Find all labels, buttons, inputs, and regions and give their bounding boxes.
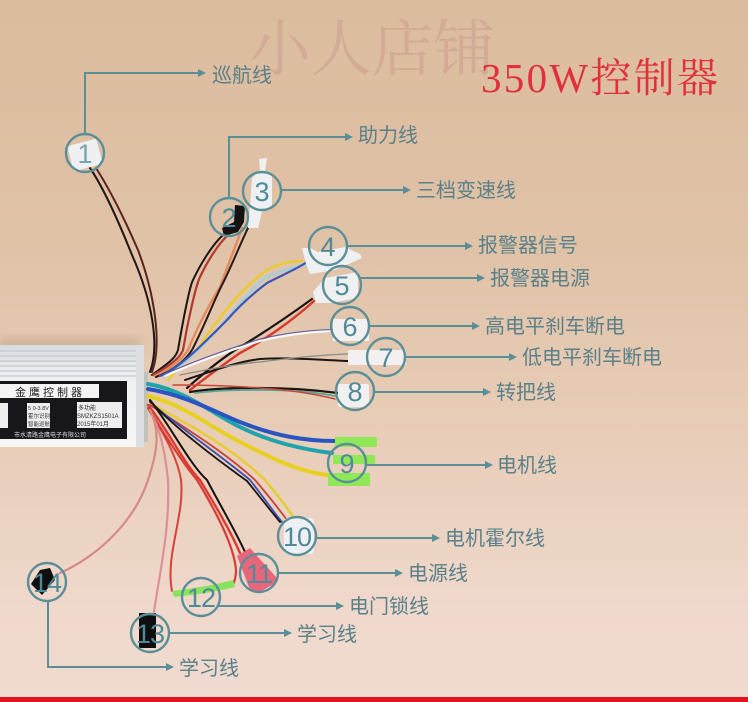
callout 5 xyxy=(323,266,590,304)
connector 8 plug xyxy=(338,384,369,407)
callout 10: 电机霍尔线 xyxy=(445,527,545,550)
connector 13 plug xyxy=(139,613,156,648)
connector 1 plug xyxy=(67,139,103,171)
callout 2: 2 xyxy=(221,203,237,233)
connector 3 plug xyxy=(248,158,272,228)
wires: connectors 6 and 7 xyxy=(165,330,348,380)
callout 5: 报警器电源 xyxy=(490,267,590,290)
connector 9 terminals xyxy=(328,437,377,486)
controller label: 5 0-3.8V xyxy=(28,406,49,412)
callout 6: 6 xyxy=(342,312,358,342)
wires: connectors 4 and 5 xyxy=(160,261,314,390)
callout 14: 学习线 xyxy=(179,657,239,680)
callout 9: 电机线 xyxy=(497,454,557,477)
connector 4 plug xyxy=(302,247,362,274)
callout 9: 9 xyxy=(339,449,355,479)
callout 11: 电源线 xyxy=(408,562,468,585)
callout 14 xyxy=(28,563,239,680)
controller unit xyxy=(0,338,148,447)
controller label xyxy=(0,381,127,439)
callout 2 xyxy=(210,124,418,236)
wires: connectors 2 and 3 xyxy=(152,228,248,377)
wires: connector 8 xyxy=(173,385,338,399)
callout 7: 7 xyxy=(378,343,394,373)
wires: connectors 9 xyxy=(148,384,335,475)
callout 11 xyxy=(240,554,468,592)
connector 5 plug xyxy=(313,272,358,303)
callout 12: 12 xyxy=(187,583,215,613)
callout 10 xyxy=(278,517,545,555)
callout 12: 电门锁线 xyxy=(349,595,429,618)
wires: connector 13 xyxy=(152,415,168,612)
wire bundle xyxy=(60,168,348,612)
callout 13: 13 xyxy=(136,619,164,649)
wires: connector 11 and 12 loop xyxy=(148,400,245,591)
controller label: 智能巡航 xyxy=(28,420,51,428)
callout 6: 高电平刹车断电 xyxy=(485,315,625,338)
callout 13 xyxy=(131,614,357,652)
callout 8: 8 xyxy=(347,377,363,407)
callout 4 xyxy=(309,227,578,265)
callout 1: 巡航线 xyxy=(212,64,272,87)
callout 7 xyxy=(367,338,662,376)
controller label: 多功能 xyxy=(78,404,96,412)
controller label: 霍尔识别 xyxy=(28,412,50,420)
controller label: SMZKZS1501A xyxy=(77,414,119,420)
callout 4: 报警器信号 xyxy=(478,234,578,257)
wires: connector 1 xyxy=(90,168,157,372)
callout 1: 1 xyxy=(77,139,93,169)
title: 350W控制器 xyxy=(481,55,718,101)
connector 7 plug xyxy=(348,350,406,365)
connector 12 sleeve xyxy=(172,580,235,597)
callout 13: 学习线 xyxy=(297,623,357,646)
connector shapes xyxy=(31,139,406,648)
callout 7: 低电平刹车断电 xyxy=(522,346,662,369)
callout 14: 14 xyxy=(33,568,62,598)
controller label: 2015年01月 xyxy=(77,420,109,428)
callout 12 xyxy=(182,578,429,618)
callout 3: 三档变速线 xyxy=(416,179,516,202)
callout 9 xyxy=(328,444,557,482)
connector 6 plug xyxy=(333,319,369,341)
watermark: 小人店铺 xyxy=(249,16,495,84)
callout 1 xyxy=(66,64,272,172)
wires: connector 14 xyxy=(60,410,157,573)
bottom red bar xyxy=(0,697,748,702)
connector 2 plug xyxy=(222,205,245,236)
callout 3 xyxy=(243,172,516,210)
callout 6 xyxy=(331,307,625,345)
callout 8: 转把线 xyxy=(496,381,556,404)
callout 4: 4 xyxy=(320,232,336,262)
callout 10: 10 xyxy=(283,522,311,552)
controller label: 金鹰控制器 xyxy=(15,385,85,399)
controller label: 市水清路金鹰电子有限公司 xyxy=(14,431,86,439)
callout 5: 5 xyxy=(334,271,350,301)
connector 14 plug xyxy=(31,568,55,595)
callout 11: 11 xyxy=(246,559,272,589)
connector 10 plug xyxy=(284,518,314,554)
callout 8 xyxy=(336,372,556,410)
callout 3: 3 xyxy=(254,177,270,207)
connector 11 plug xyxy=(237,548,277,592)
callout 2: 助力线 xyxy=(358,124,418,147)
wires: connector 10 xyxy=(150,401,292,522)
